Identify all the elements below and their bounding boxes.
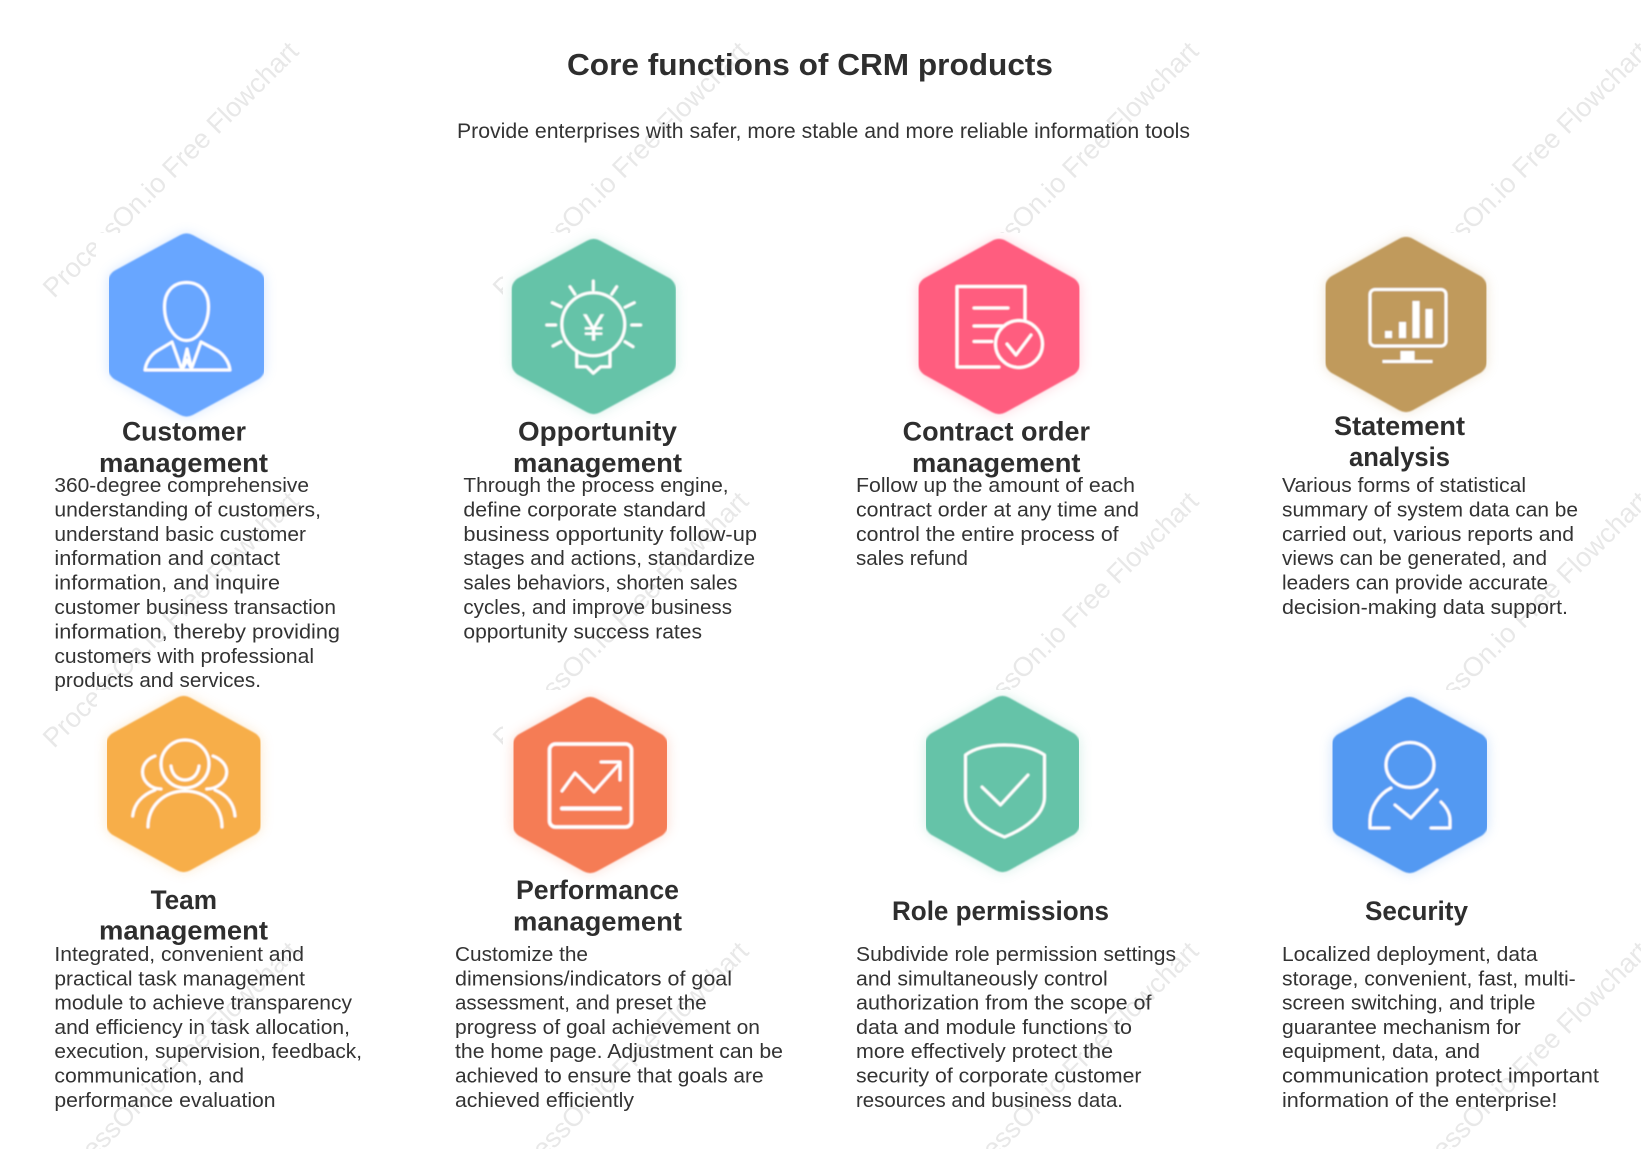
description text: resources and business data. [856,1089,1123,1112]
description text: progress of goal achievement on [455,1016,760,1039]
description text: execution, supervision, feedback, [54,1040,362,1063]
heading: management [912,448,1081,478]
heading [513,875,682,936]
heading [1334,411,1465,472]
title: Core functions of CRM products [567,47,1053,82]
heading [99,885,268,945]
heading: Opportunity [518,416,677,446]
description text [1282,943,1599,1112]
description text: Follow up the amount of each [856,474,1135,497]
heading: Contract order [903,416,1090,446]
watermark: repeated ProcessOn text: ProcessOn.io Free Flowchart [487,36,755,303]
description text: customers with professional [54,645,314,668]
description text: authorization from the scope of [856,992,1152,1015]
description text: summary of system data can be [1282,498,1578,521]
watermark: repeated ProcessOn text: ProcessOn.io Free Flowchart [487,486,755,753]
heading: Role permissions [892,896,1109,926]
description text: control the entire process of [856,523,1119,546]
panel: statement analysis [1282,251,1578,619]
description text: guarantee mechanism for [1282,1016,1521,1039]
description text [54,943,362,1112]
description text: define corporate standard [463,498,706,521]
panel: contract order management [856,253,1139,570]
description text [856,943,1176,1112]
description text: opportunity success rates [463,620,702,643]
description text: business opportunity follow-up [463,523,757,546]
panel: opportunity management [463,253,757,643]
description text: sales refund [856,547,968,570]
watermark: repeated ProcessOn text: ProcessOn.io Free Flowchart [37,36,305,303]
description text: decision-making data support. [1282,596,1568,619]
description text: products and services. [54,669,261,692]
icon: green hexagon with yen light bulb: ¥ [582,308,605,350]
description text: the home page. Adjustment can be [455,1040,783,1063]
description text: information and contact [54,547,280,570]
description text: 360-degree comprehensive [54,474,309,497]
description text: Customize the [455,943,588,966]
description text: assessment, and preset the [455,992,707,1015]
description text: Various forms of statistical [1282,474,1526,497]
description text: dimensions/indicators of goal [455,967,732,990]
icon: pink hexagon with document and check [932,253,1066,400]
description text: information, and inquire [54,572,280,595]
watermark: repeated ProcessOn text: ProcessOn.io Free Flowchart [37,486,305,753]
heading [99,416,268,478]
icon: blue hexagon with businessman [122,248,251,402]
panel: role permissions [856,710,1176,1112]
heading: management [99,448,268,478]
description text: data and module functions to [856,1016,1132,1039]
panel: performance management [455,711,783,1112]
description text: Through the process engine, [463,474,729,497]
description text [1282,474,1578,619]
description text: sales behaviors, shorten sales [463,572,738,595]
icon: gold hexagon with monitor chart [1339,251,1473,398]
description text: views can be generated, and [1282,547,1547,570]
description text: and efficiency in task allocation, [54,1016,350,1039]
description text: and simultaneously control [856,967,1108,990]
description text: customer business transaction [54,596,336,619]
heading [513,416,682,478]
description text: understand basic customer [54,523,306,546]
icon: blue hexagon with verified user [1346,711,1474,859]
description text: security of corporate customer [856,1064,1142,1088]
icon: orange hexagon with team [120,710,248,858]
description text: information, thereby providing [54,620,340,643]
description text: stages and actions, standardize [463,547,755,570]
heading: Performance [516,875,679,905]
heading: Security [1365,896,1468,926]
description text [463,474,757,643]
watermark: repeated ProcessOn text: ProcessOn.io Free Flowchart [937,486,1205,753]
heading [903,416,1090,478]
icon: coral hexagon with growth chart [526,711,654,859]
description text: contract order at any time and [856,498,1139,521]
panel: customer management [54,248,340,692]
heading: analysis [1349,442,1450,472]
description text: storage, convenient, fast, multi- [1282,967,1576,990]
heading: Statement [1334,411,1465,441]
description text: carried out, various reports and [1282,523,1574,546]
description text: Localized deployment, data [1282,943,1538,966]
description text: practical task management [54,967,305,990]
description text: communication protect important [1282,1064,1599,1088]
description text: achieved to ensure that goals are [455,1064,764,1088]
description text: communication, and [54,1064,244,1088]
description text: equipment, data, and [1282,1040,1480,1063]
description text: cycles, and improve business [463,596,732,619]
description text: screen switching, and triple [1282,992,1535,1015]
description text [455,943,783,1112]
description text: performance evaluation [54,1089,276,1112]
heading: Team [151,885,217,915]
description text: leaders can provide accurate [1282,572,1548,595]
heading: management [513,906,682,936]
description text: module to achieve transparency [54,992,353,1015]
icon: green hexagon with yen light bulb [526,253,662,400]
description text [856,474,1139,570]
heading: management [513,448,682,478]
heading: management [99,915,268,945]
panel: security [1282,711,1599,1112]
description text: understanding of customers, [54,498,321,521]
description text: Integrated, convenient and [54,943,304,966]
panel: team management [54,710,362,1112]
heading: Customer [122,416,246,446]
description text: information of the enterprise! [1282,1089,1557,1112]
icon: green hexagon with shield [939,710,1066,858]
subtitle: Provide enterprises with safer, more stable and more reliable information tools [457,120,1190,143]
description text: Subdivide role permission settings [856,943,1176,966]
description text [54,474,340,692]
description text: achieved efficiently [455,1089,635,1112]
watermark: repeated ProcessOn text: ProcessOn.io Free Flowchart [937,36,1205,303]
description text: more effectively protect the [856,1040,1113,1063]
